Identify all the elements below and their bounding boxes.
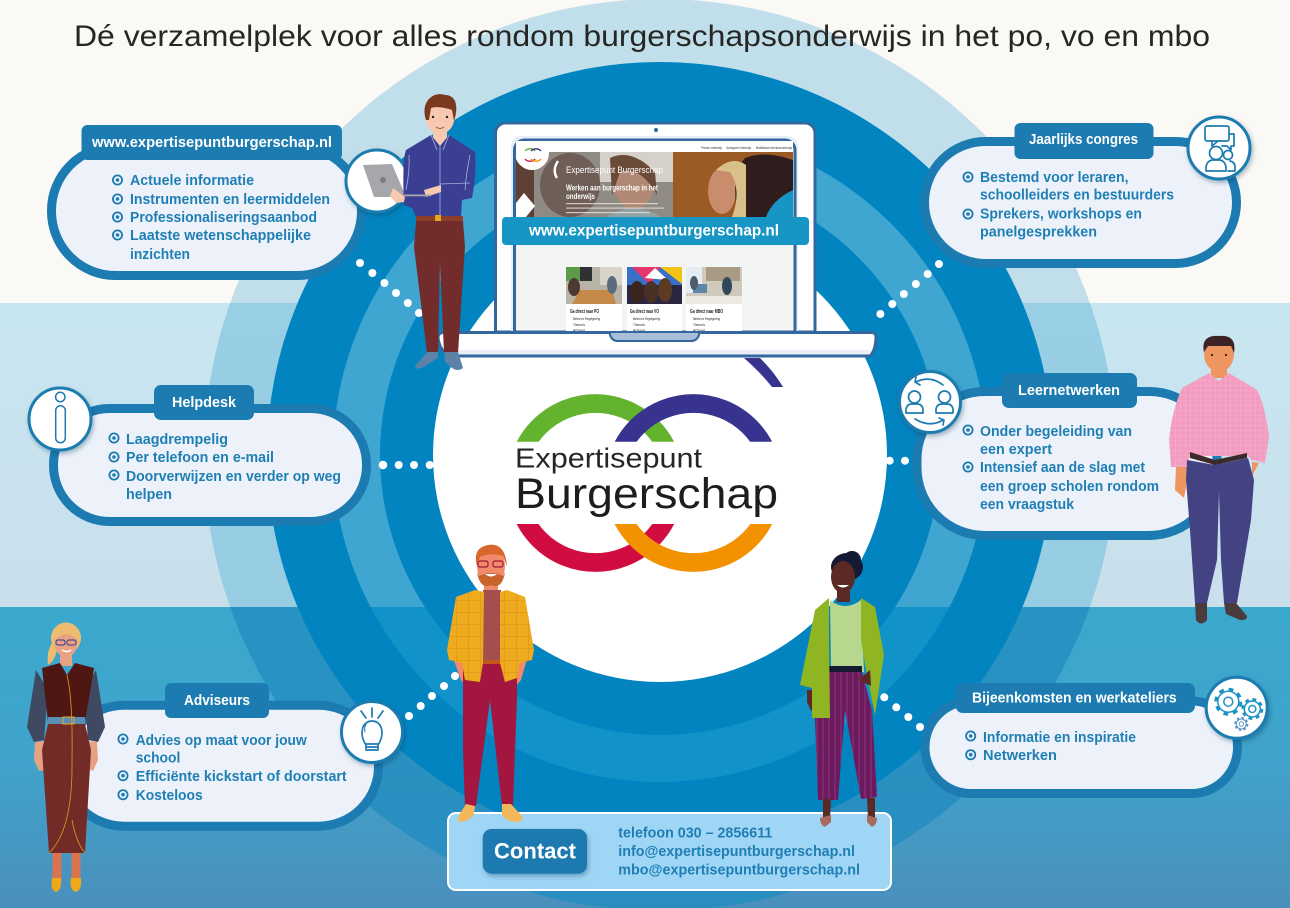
icon: exchange between two people: [900, 372, 960, 432]
website screen cards: Thema's: [573, 322, 585, 327]
contact details: telefoon 030 – 2856611: [618, 825, 772, 841]
website screen cards: Ga direct naar MBO: [690, 309, 723, 315]
panel: Adviseurs: [64, 683, 378, 826]
website screen cards: Ga direct naar PO: [570, 309, 599, 315]
website screen cards: Actueel: [573, 328, 585, 332]
tab: Jaarlijks congres: Jaarlijks congres: [1029, 132, 1138, 148]
bullets: website: Professionaliseringsaanbod: [130, 210, 317, 226]
bullets: website: Laatste wetenschappelijke: [130, 228, 311, 244]
bullets: Leernetwerken: [963, 424, 1159, 513]
website screen cards: Actueel: [693, 328, 705, 332]
bullets: Leernetwerken: een groep scholen rondom: [980, 479, 1159, 495]
bullets: Leernetwerken: Onder begeleiding van: [980, 424, 1132, 440]
bullets: Helpdesk: [109, 432, 341, 503]
bullets: Helpdesk: Laagdrempelig: [126, 432, 228, 448]
icon: laptop in circle: [346, 150, 408, 212]
bullets: Adviseurs: [118, 733, 347, 804]
bullets: Adviseurs: Advies op maat voor jouw: [136, 733, 307, 749]
bullets: Leernetwerken: Intensief aan de slag met: [980, 460, 1145, 476]
website screen cards: [566, 267, 742, 332]
website screen hero: Expertisepunt Burgerschap: [566, 165, 663, 175]
website screen cards: Thema's: [633, 322, 645, 327]
icon: people talking: [1188, 117, 1250, 179]
bullets: Leernetwerken: een vraagstuk: [980, 497, 1075, 513]
icon: light bulb: [342, 702, 402, 762]
bullets: Adviseurs: Kosteloos: [136, 788, 203, 804]
website screen hero: onderwijs: [566, 192, 595, 201]
bullets: website: inzichten: [130, 247, 190, 263]
bullets: Leernetwerken: een expert: [980, 442, 1052, 458]
logo: Expertisepunt Burgerschap: Expertisepunt: [515, 443, 702, 474]
panel: Helpdesk: [54, 385, 366, 522]
person: man in pink shirt: [1169, 336, 1269, 624]
tab: Helpdesk: Helpdesk: [172, 395, 237, 411]
tab: Bijeenkomsten en werkateliers: [956, 683, 1195, 713]
bullets: Jaarlijks congres: panelgesprekken: [980, 225, 1097, 241]
website screen hero: [515, 136, 793, 217]
person: woman in green jacket: [800, 551, 884, 827]
tab: Bijeenkomsten en werkateliers: Bijeenkomsten en werkateliers: [972, 690, 1177, 706]
tab: Leernetwerken: [1002, 373, 1137, 408]
bullets: Jaarlijks congres: Bestemd voor leraren,: [980, 170, 1128, 186]
bullets: website: Instrumenten en leermiddelen: [130, 192, 330, 208]
contact button: [483, 829, 587, 874]
website screen hero: Middelbaar beroepsonderwijs: [756, 145, 792, 150]
person: woman in brown dress: [27, 622, 105, 892]
website screen hero: Werken aan burgerschap in het: [566, 184, 658, 192]
bullets: Helpdesk: Doorverwijzen en verder op weg: [126, 469, 341, 485]
website URL bar: [502, 217, 809, 245]
website screen hero: Primair onderwijs: [701, 145, 722, 150]
website screen cards: Actueel: [633, 328, 645, 332]
connector dots: [356, 259, 943, 731]
bullets: Helpdesk: Per telefoon en e-mail: [126, 450, 274, 466]
person: man in yellow jacket: [447, 545, 534, 822]
bullets: Helpdesk: helpen: [126, 487, 172, 503]
bullets: Jaarlijks congres: schoolleiders en bestuurders: [980, 188, 1174, 204]
website screen hero: Voortgezet onderwijs: [726, 145, 751, 150]
tab: Adviseurs: Adviseurs: [184, 693, 250, 709]
panel: Jaarlijks congres: [924, 123, 1236, 264]
panel: Bijeenkomsten en werkateliers: [925, 683, 1238, 794]
contact panel: [448, 813, 891, 890]
person: man in blue shirt with tablet: [390, 94, 476, 370]
logo: Expertisepunt Burgerschap: Burgerschap: [515, 470, 778, 518]
bullets: Jaarlijks congres: Sprekers, workshops en: [980, 207, 1142, 223]
bullets: Bijeenkomsten en werkateliers: Informatie en inspiratie: [983, 730, 1136, 746]
laptop: [438, 123, 876, 356]
icon: info: [29, 388, 91, 450]
bullets: Adviseurs: Efficiënte kickstart of doorstart: [136, 769, 347, 785]
icon: gears: [1206, 677, 1267, 738]
panel: website: [52, 125, 362, 276]
panel: Leernetwerken: [917, 373, 1217, 536]
tab: Adviseurs: [165, 683, 269, 718]
bullets: website: [113, 173, 330, 263]
tab: website address: [82, 125, 342, 160]
bullets: Bijeenkomsten en werkateliers: Netwerken: [983, 748, 1057, 764]
title: Dé verzamelplek voor alles rondom burgerschapsonderwijs in het po, vo en mbo: [74, 20, 1210, 53]
tab: Leernetwerken: Leernetwerken: [1018, 383, 1120, 399]
bullets: Bijeenkomsten en werkateliers: [966, 730, 1136, 764]
bullets: Adviseurs: school: [136, 751, 180, 767]
bullets: website: Actuele informatie: [130, 173, 254, 189]
website screen cards: Beleid en Regelgeving: [573, 316, 600, 321]
website URL bar: www.expertisepuntburgerschap.nl: [528, 222, 779, 240]
website screen cards: Ga direct naar VO: [630, 309, 659, 315]
tab: Jaarlijks congres: [1014, 123, 1154, 159]
contact details: [618, 825, 860, 878]
tab: website address: www.expertisepuntburgerschap.nl: [91, 135, 332, 151]
tab: Helpdesk: [154, 385, 254, 420]
laptop base: [438, 332, 876, 356]
contact details: mbo@expertisepuntburgerschap.nl: [618, 862, 860, 878]
bullets: Jaarlijks congres: [963, 170, 1174, 241]
website screen cards: Beleid en Regelgeving: [693, 316, 720, 321]
logo: Expertisepunt Burgerschap: [515, 358, 783, 562]
website screen cards: Thema's: [693, 322, 705, 327]
website screen cards: Beleid en Regelgeving: [633, 316, 660, 321]
contact details: info@expertisepuntburgerschap.nl: [618, 844, 855, 860]
contact button: Contact: [494, 838, 576, 864]
